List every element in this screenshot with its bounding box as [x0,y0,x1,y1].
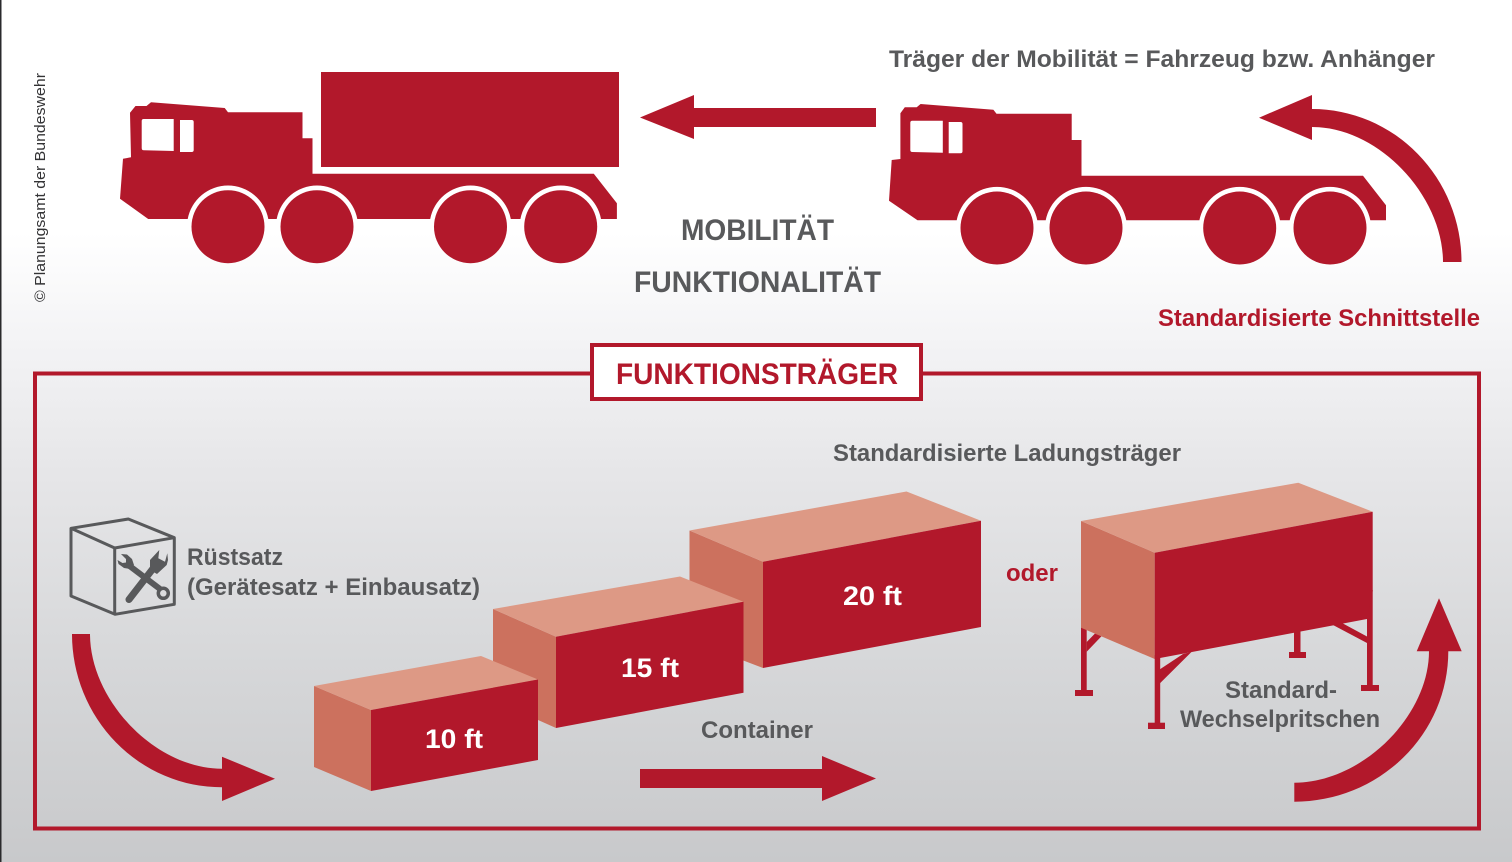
heading: Funktionsträger [592,345,921,399]
container: 15 ft [493,576,744,728]
container: 15 ft: 15 ft [621,653,679,683]
container: 20 ft: 20 ft [843,581,902,611]
truck with empty flatbed [889,104,1386,264]
label: Standard-Wechselpritschen [1180,677,1380,733]
arrow: container direction [640,756,876,801]
curved arrow: swap body to container [1294,598,1462,802]
truck body with cab [889,104,1386,220]
icon: box with tools [71,519,174,614]
swap body on legs [1075,483,1379,729]
label: Container: Container [701,717,813,744]
label: Funktionalität: FUNKTIONALITÄT [634,266,881,299]
wheels [192,190,597,263]
curved arrow: Rüstsatz to container [72,634,275,801]
arrow: container onto truck [640,95,876,139]
label: Standardisierte Schnittstelle: Standardisierte Schnittstelle [1158,305,1480,332]
copyright note: © Planungsamt der Bundeswehr [32,73,49,302]
label: Standardisierte Ladungsträger: Standardisierte Ladungsträger [833,440,1181,467]
label: Standard-Wechselpritschen: Standard- [1225,677,1337,704]
truck with mounted container [120,72,619,263]
label: oder: oder [1006,560,1058,587]
truck body with cab [120,102,617,219]
mounted container [321,72,619,167]
label: Mobilität: MOBILITÄT [681,214,834,247]
heading: Träger der Mobilität: Träger der Mobilität = Fahrzeug bzw. Anhänger [889,46,1435,73]
heading: Funktionsträger: FUNKTIONSTRÄGER [616,358,898,391]
label: Rüstsatz: Rüstsatz [187,544,283,571]
wheels [960,192,1366,264]
label: Standard-Wechselpritschen: Wechselpritschen [1180,706,1380,733]
container: 10 ft [314,656,538,791]
curved arrow: standard interface [1259,95,1462,262]
panel: Funktionsträger frame [35,374,1479,828]
legs [1075,590,1379,729]
label: Gerätesatz + Einbausatz: (Gerätesatz + Einbausatz) [187,574,480,601]
container: 10 ft: 10 ft [425,724,483,754]
container: 20 ft [690,492,981,668]
